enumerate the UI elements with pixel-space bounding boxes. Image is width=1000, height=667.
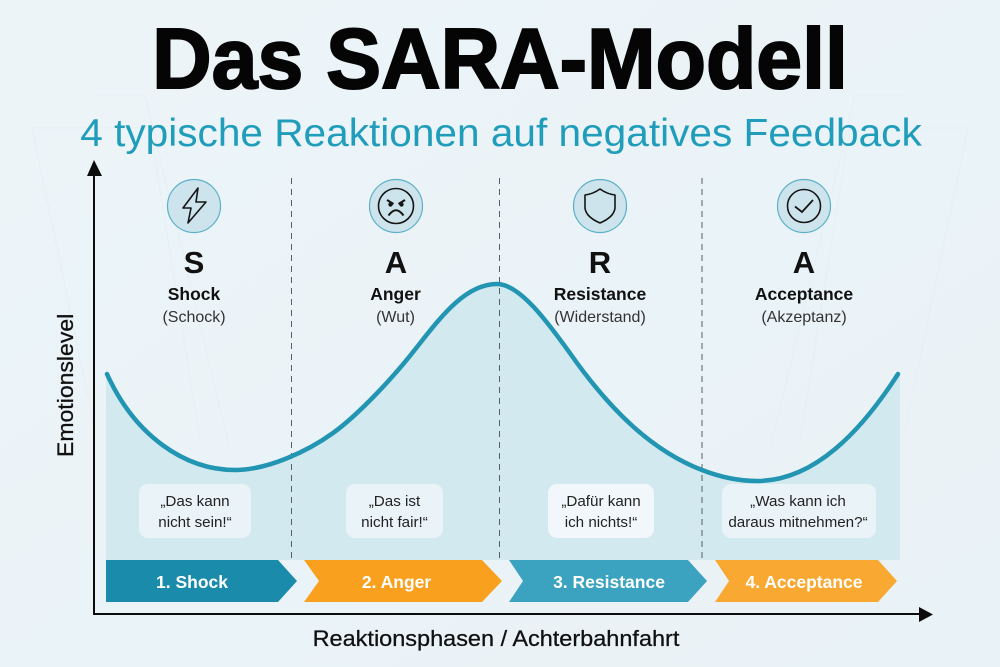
emotion curve bbox=[107, 284, 898, 481]
translation Schock: (Schock) bbox=[162, 309, 226, 326]
arrow: 3. Resistance: 3. Resistance bbox=[553, 572, 665, 592]
letter R: R bbox=[589, 245, 611, 280]
y axis label: Emotionslevel bbox=[52, 314, 78, 457]
arrow: 1. Shock bbox=[106, 560, 297, 602]
translation Widerstand: (Widerstand) bbox=[554, 309, 646, 326]
x axis bbox=[93, 607, 933, 622]
quote: Was kann ich daraus mitnehmen bbox=[722, 484, 876, 538]
label Acceptance: Acceptance bbox=[755, 284, 853, 304]
icon: shield bbox=[574, 180, 626, 232]
quote: Das ist nicht fair: nicht fair!“ bbox=[361, 514, 428, 531]
quote: Das ist nicht fair bbox=[346, 484, 443, 538]
area under curve bbox=[106, 284, 900, 560]
label Anger: Anger bbox=[370, 284, 421, 304]
arrow: 1. Shock: 1. Shock bbox=[156, 572, 228, 592]
quote: Was kann ich daraus mitnehmen: „Was kann ich bbox=[750, 493, 846, 510]
icon: lightning bolt bbox=[168, 180, 220, 232]
letter A: A bbox=[385, 245, 407, 280]
arrow: 4. Acceptance bbox=[715, 560, 897, 602]
quote: Das kann nicht sein bbox=[139, 484, 251, 538]
quote: Dafür kann ich nichts bbox=[548, 484, 654, 538]
column: Resistance bbox=[554, 180, 646, 326]
quote: Das kann nicht sein: nicht sein!“ bbox=[158, 514, 232, 531]
x axis label: Reaktionsphasen / Achterbahnfahrt bbox=[313, 625, 680, 651]
column: Acceptance bbox=[755, 180, 853, 326]
label Resistance: Resistance bbox=[554, 284, 646, 304]
icon: angry face bbox=[370, 180, 422, 232]
quote: Das kann nicht sein: „Das kann bbox=[160, 493, 230, 510]
quote: Dafür kann ich nichts: „Dafür kann bbox=[561, 493, 641, 510]
phase dividers bbox=[292, 178, 702, 560]
letter S: S bbox=[184, 245, 204, 280]
arrow: 4. Acceptance: 4. Acceptance bbox=[745, 572, 863, 592]
quote: Dafür kann ich nichts: ich nichts!“ bbox=[565, 514, 637, 531]
label Shock: Shock bbox=[168, 284, 221, 304]
column: Shock bbox=[162, 180, 226, 326]
arrow: 3. Resistance bbox=[509, 560, 707, 602]
quote: Das ist nicht fair: „Das ist bbox=[369, 493, 421, 510]
arrow: 2. Anger bbox=[304, 560, 502, 602]
subtitle: 4 typische Reaktionen auf negatives Feedback bbox=[80, 112, 922, 155]
quote: Was kann ich daraus mitnehmen: daraus mitnehmen?“ bbox=[728, 514, 868, 531]
title: Das SARA-Modell bbox=[152, 11, 848, 106]
translation Wut: (Wut) bbox=[376, 309, 415, 326]
column: Anger bbox=[370, 180, 422, 326]
translation Akzeptanz: (Akzeptanz) bbox=[761, 309, 847, 326]
y axis bbox=[87, 160, 102, 614]
icon: check circle bbox=[778, 180, 830, 232]
arrow: 2. Anger: 2. Anger bbox=[362, 572, 431, 592]
letter A: A bbox=[793, 245, 815, 280]
